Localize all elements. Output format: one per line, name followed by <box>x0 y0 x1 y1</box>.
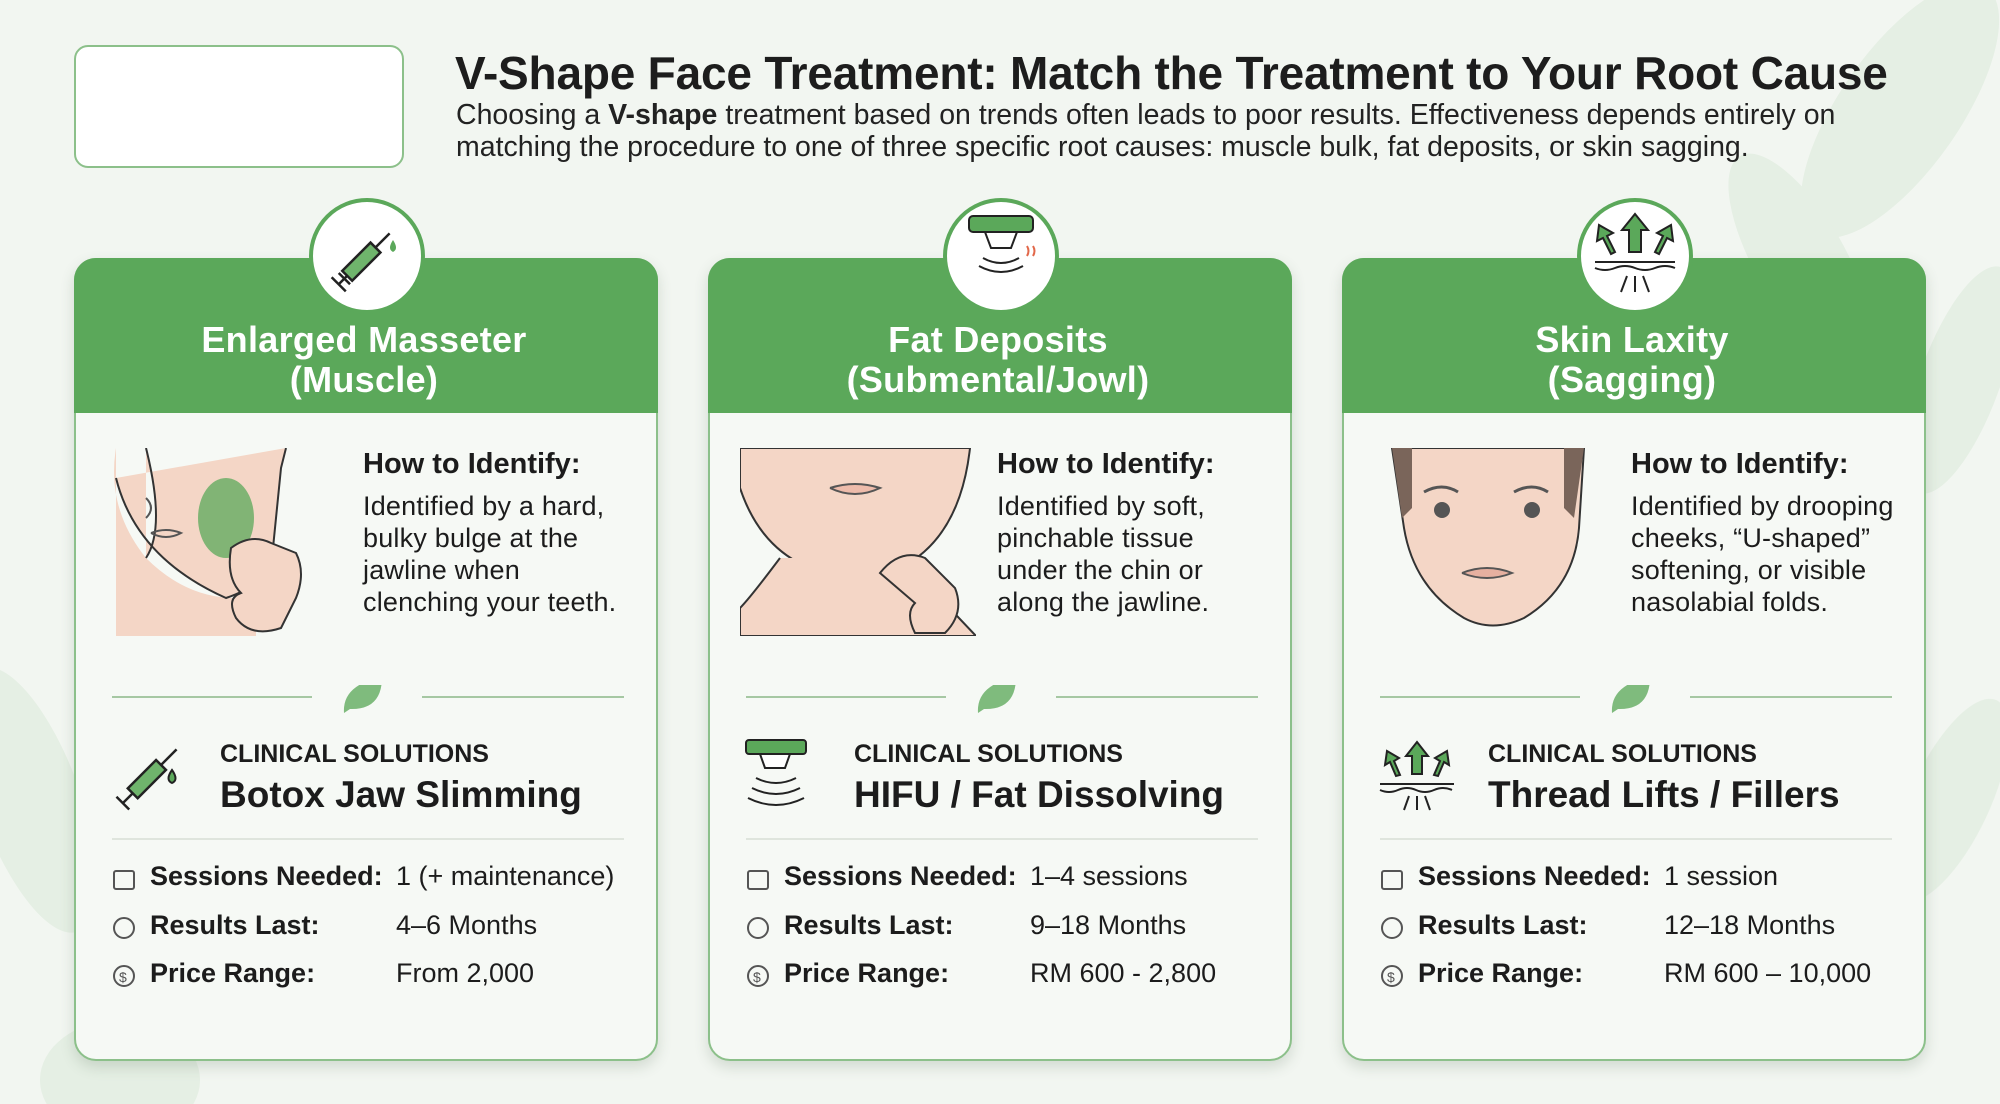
divider leaf <box>1380 685 1892 713</box>
stats: 1 session <box>1664 861 1778 891</box>
subtitle: Choosing a V-shape treatment based on trends often leads to poor results. Effectiveness depends entirely on matching the procedure to one of three specific root causes: muscle bulk, fat deposits, or skin sagging. <box>456 99 1835 163</box>
stats: Sessions Needed: <box>150 861 383 891</box>
header <box>1342 258 1926 413</box>
solution icon <box>745 739 807 806</box>
stats: 1–4 sessions <box>1030 861 1188 891</box>
panel: muscle: Botox Jaw Slimming <box>220 774 582 815</box>
panel: skin laxity: 12–18 Months <box>1664 910 1835 940</box>
panel: fat: Results Last: <box>784 910 954 940</box>
logo placeholder box <box>74 45 404 168</box>
panel: muscle: $ <box>119 969 127 985</box>
header: Fat Deposits <box>888 319 1108 360</box>
panel: skin laxity: Results Last: <box>1418 910 1588 940</box>
header: (Muscle) <box>290 359 438 400</box>
panel: skin laxity <box>1342 258 1926 1061</box>
header <box>708 258 1292 413</box>
stats <box>113 861 614 891</box>
panel: muscle: From 2,000 <box>396 958 534 988</box>
how to identify: How to Identify: <box>363 448 580 480</box>
panel: fat: Identified by soft, pinchable tissue under the chin or along the jawline. <box>997 491 1209 617</box>
header: Enlarged Masseter <box>201 319 527 360</box>
how to identify: How to Identify: <box>997 448 1214 480</box>
stats <box>1381 861 1778 891</box>
how to identify: How to Identify: <box>1631 448 1848 480</box>
panel: muscle: Price Range: <box>150 958 315 988</box>
panel: fat: HIFU / Fat Dissolving <box>854 774 1224 815</box>
divider leaf <box>746 685 1258 713</box>
stats: Sessions Needed: <box>784 861 1017 891</box>
panel: fat <box>708 258 1292 1061</box>
illustration: chin pinch <box>740 448 976 636</box>
stats: 1 (+ maintenance) <box>396 861 614 891</box>
panel: skin laxity: $ <box>1387 969 1395 985</box>
panel: muscle: Results Last: <box>150 910 320 940</box>
panel: muscle: 4–6 Months <box>396 910 537 940</box>
panel: fat: Price Range: <box>784 958 949 988</box>
divider leaf <box>112 685 624 713</box>
header <box>74 258 658 413</box>
icon: lift arrows circle <box>1577 198 1693 314</box>
stats <box>747 861 1188 891</box>
header: (Submental/Jowl) <box>847 359 1149 400</box>
icon: syringe circle <box>309 198 425 314</box>
panel: fat: 9–18 Months <box>1030 910 1186 940</box>
panel: fat: CLINICAL SOLUTIONS <box>854 740 1123 768</box>
panel: skin laxity: CLINICAL SOLUTIONS <box>1488 740 1757 768</box>
illustration: sagging face <box>1391 448 1585 626</box>
solution icon <box>1380 740 1454 810</box>
illustration: face with fist <box>114 448 302 636</box>
panel: muscle: CLINICAL SOLUTIONS <box>220 740 489 768</box>
header: (Sagging) <box>1548 359 1716 400</box>
panel: skin laxity: RM 600 – 10,000 <box>1664 958 1871 988</box>
icon: HIFU device circle <box>943 198 1059 314</box>
panel: fat: $ <box>753 969 761 985</box>
panel: muscle: Identified by a hard, bulky bulge at the jawline when clenching your teeth. <box>363 491 616 617</box>
title: V-Shape Face Treatment: Match the Treatment to Your Root Cause <box>455 47 1888 99</box>
solution icon <box>116 748 178 810</box>
header: Skin Laxity <box>1535 319 1729 360</box>
panel: muscle <box>74 258 658 1061</box>
panel: fat: RM 600 - 2,800 <box>1030 958 1216 988</box>
panel: skin laxity: Thread Lifts / Fillers <box>1488 774 1840 815</box>
panel: skin laxity: Price Range: <box>1418 958 1583 988</box>
stats: Sessions Needed: <box>1418 861 1651 891</box>
panel: skin laxity: Identified by drooping cheeks, “U-shaped” softening, or visible nasolabial folds. <box>1631 491 1894 617</box>
